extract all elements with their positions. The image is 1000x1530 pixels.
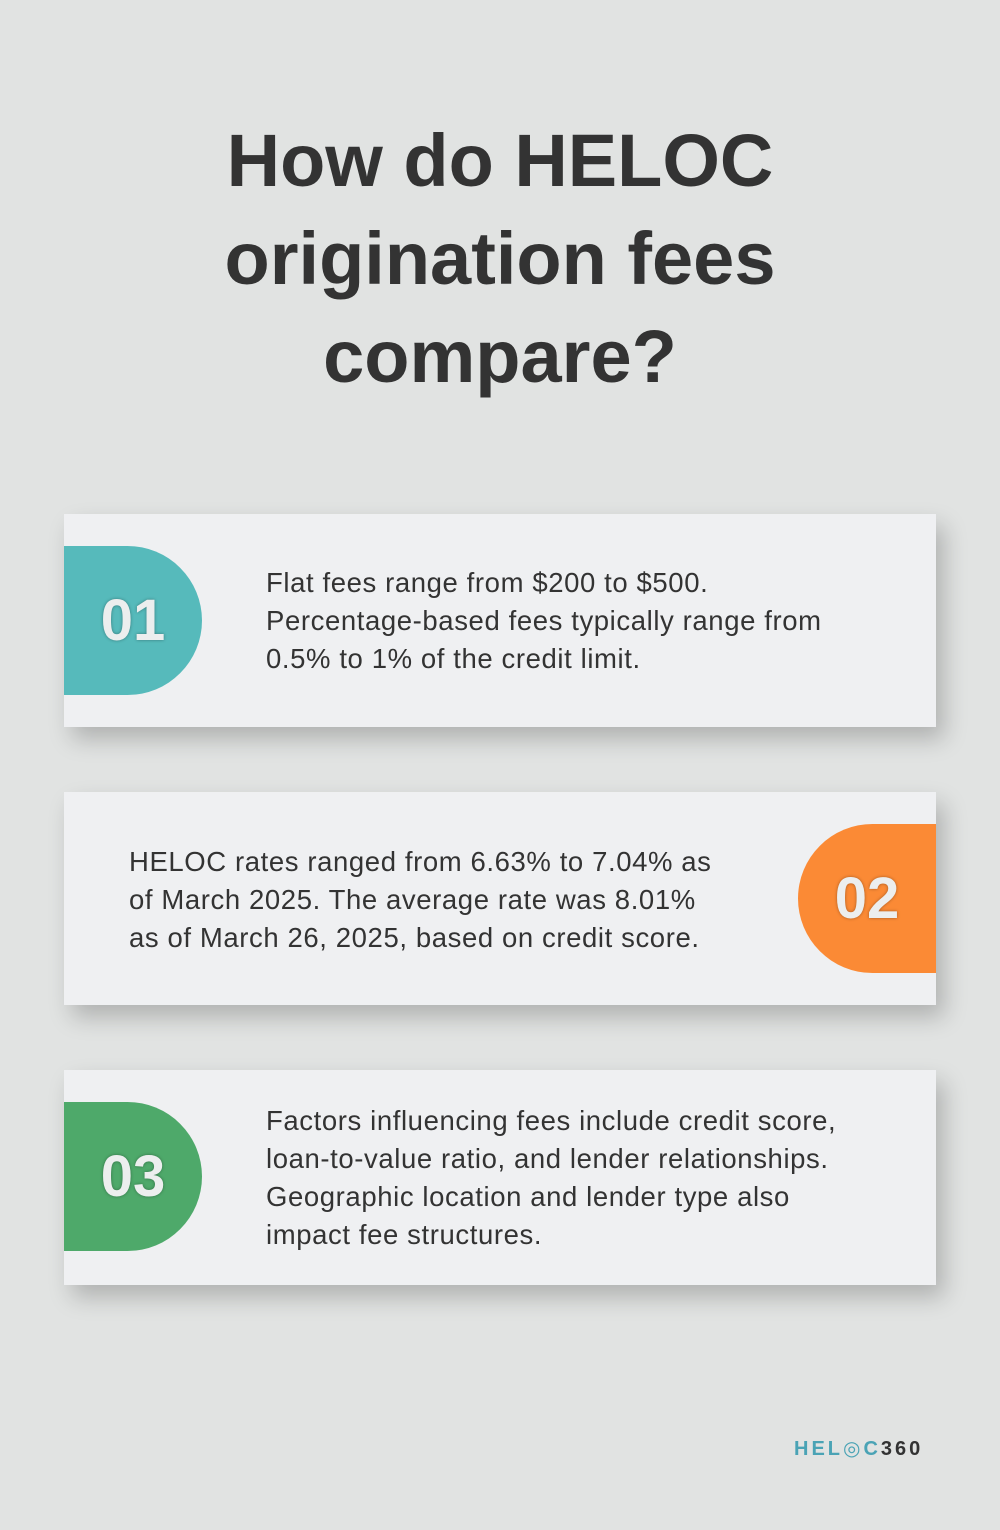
title: origination fees	[225, 217, 775, 300]
text 03: loan-to-value ratio, and lender relationships.	[266, 1143, 829, 1174]
title: compare?	[323, 315, 677, 398]
text 02: of March 2025. The average rate was 8.01%	[129, 884, 696, 915]
text 01: Flat fees range from $200 to $500.	[266, 567, 708, 598]
badge 01	[64, 546, 202, 695]
badge 02: 02	[835, 866, 899, 931]
text 03: Geographic location and lender type also	[266, 1181, 790, 1212]
text 03: Factors influencing fees include credit score,	[266, 1105, 836, 1136]
logo: HEL◎C360	[794, 1438, 923, 1460]
panel: card 01	[64, 514, 936, 727]
text 02	[129, 846, 712, 953]
title	[225, 119, 775, 398]
badge 01: 01	[101, 588, 165, 653]
badge 02	[798, 824, 936, 973]
text 01: Percentage-based fees typically range from	[266, 605, 822, 636]
text 03: impact fee structures.	[266, 1219, 542, 1250]
badge 03	[64, 1102, 202, 1251]
text 01: 0.5% to 1% of the credit limit.	[266, 643, 641, 674]
text 02: HELOC rates ranged from 6.63% to 7.04% as	[129, 846, 712, 877]
title: How do HELOC	[227, 119, 773, 202]
text 02: as of March 26, 2025, based on credit score.	[129, 922, 700, 953]
badge 03: 03	[101, 1144, 165, 1209]
text 03	[266, 1105, 836, 1250]
panel: card 02	[64, 792, 936, 1005]
text 01	[266, 567, 822, 674]
panel: card 03	[64, 1070, 936, 1285]
